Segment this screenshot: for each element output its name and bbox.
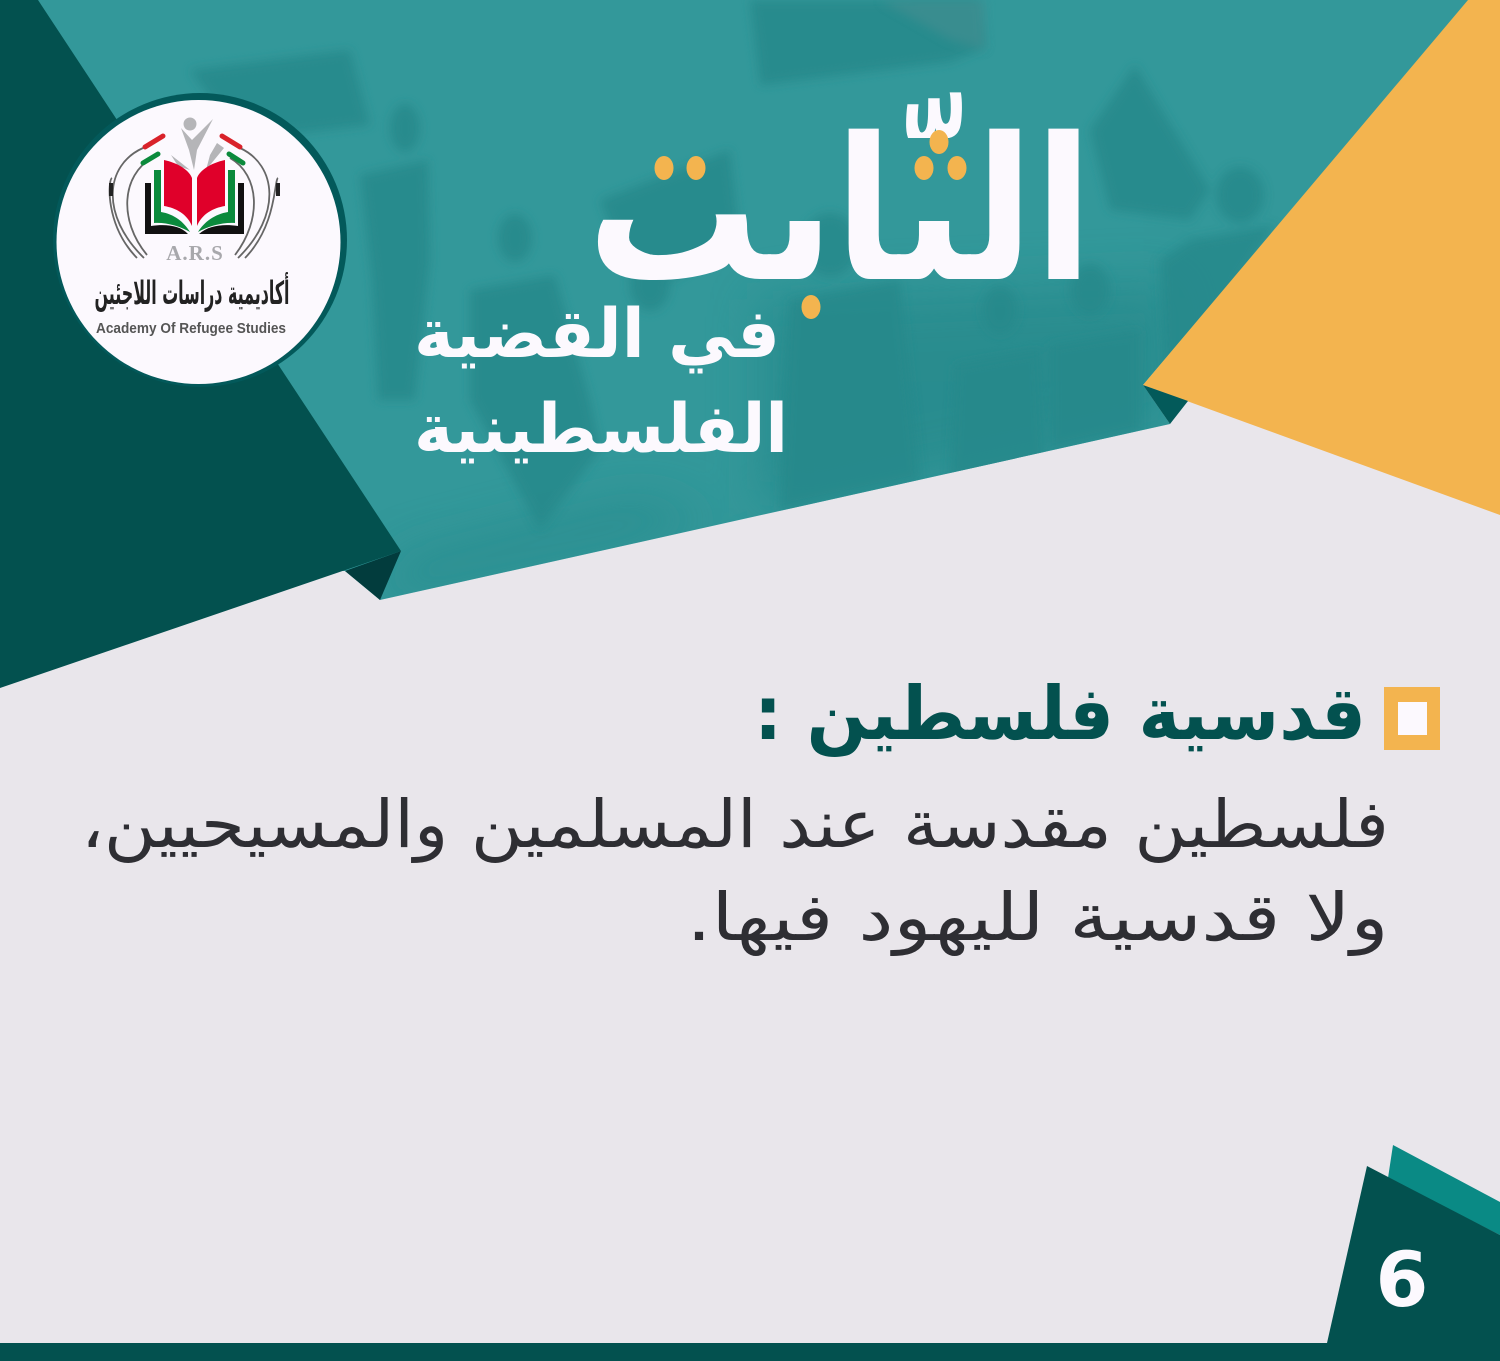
page corner accent: [1388, 1145, 1500, 1235]
subtitle line 2: الفلسطينية: [414, 390, 788, 469]
logo arcs: [110, 148, 278, 258]
logo ring: [53, 93, 347, 387]
logo English name: Academy Of Refugee Studies: [96, 321, 286, 337]
logo A.R.S: A.R.S: [166, 241, 224, 265]
panel: orange triangle: [1143, 0, 1500, 515]
bottom bar: [0, 1343, 1500, 1361]
panel: dark left wedge: [0, 0, 401, 688]
logo laurel tips: [111, 136, 278, 196]
panel: teal header: [0, 0, 1470, 600]
page corner: [1327, 1166, 1500, 1343]
logo book: [145, 160, 244, 234]
heading: قدسية فلسطين :: [754, 671, 1366, 757]
subtitle line 1: في القضية: [414, 295, 780, 374]
logo: أكاديمية دراسات اللاجئين: [94, 272, 290, 312]
heading marker: [1384, 687, 1440, 750]
body line 1: فلسطين مقدسة عند المسلمين والمسيحيين،: [81, 786, 1389, 863]
fold: left wedge shadow: [345, 551, 401, 600]
logo emblem figure: [171, 118, 224, 170]
title: الثّابت: [587, 91, 1093, 326]
title dots: [654, 130, 966, 319]
logo disc: [56, 100, 340, 384]
photo: protesters with flags: [190, 0, 1275, 600]
logo: [53, 93, 347, 387]
body line 2: ولا قدسية لليهود فيها.: [686, 879, 1388, 956]
page number: 6: [1376, 1235, 1428, 1324]
fold: orange triangle shadow: [1143, 385, 1188, 424]
